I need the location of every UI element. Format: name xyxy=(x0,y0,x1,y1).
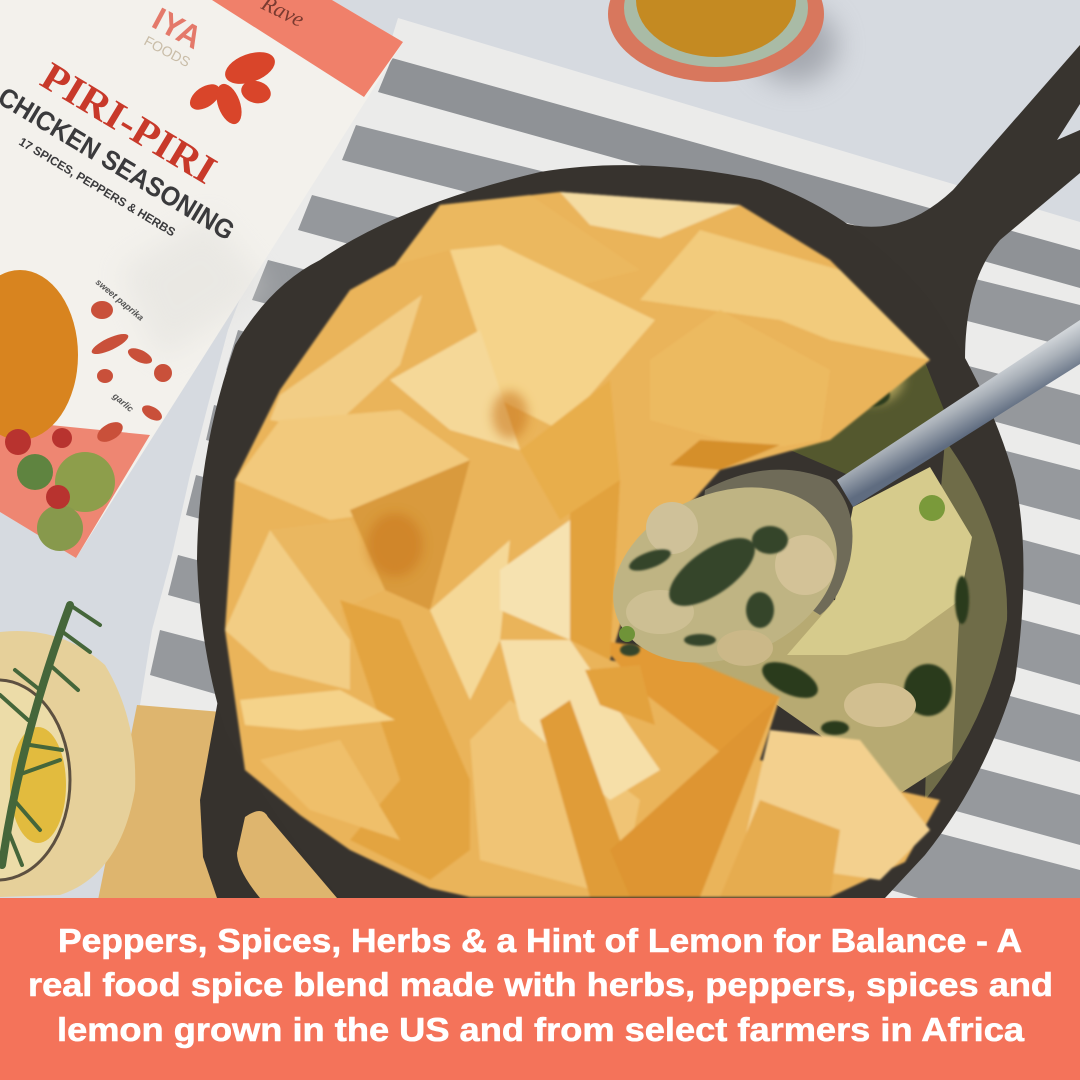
spoon handle xyxy=(837,320,1080,507)
caption banner xyxy=(0,898,1080,1080)
caption text xyxy=(28,922,1053,1048)
right wall highlight xyxy=(925,440,1007,800)
yellow napkin xyxy=(98,705,345,900)
handle opening xyxy=(237,811,337,898)
package top band xyxy=(212,0,403,97)
filling and sauce xyxy=(640,340,972,800)
skillet body xyxy=(197,165,1024,898)
skillet helper handle xyxy=(200,700,345,898)
pepper captions: sweet paprika xyxy=(94,277,146,323)
browned spots xyxy=(367,391,528,577)
pepper captions xyxy=(94,277,146,414)
cast iron skillet xyxy=(197,45,1080,898)
spice pile xyxy=(0,270,78,440)
brand logo xyxy=(142,0,279,127)
glass with rosemary xyxy=(0,605,135,897)
caption text: real food spice blend made with herbs, peppers, spices and xyxy=(28,966,1053,1003)
caption text: lemon grown in the US and from select farmers in Africa xyxy=(57,1011,1025,1048)
package tagline: 17 SPICES, PEPPERS & HERBS xyxy=(16,135,178,239)
brand logo: IYA xyxy=(147,0,208,56)
package subtitle: CHICKEN SEASONING xyxy=(0,81,240,246)
serving spoon xyxy=(587,320,1080,694)
handle slot xyxy=(1057,104,1080,140)
bowl shadow xyxy=(753,7,837,83)
cream sauce xyxy=(787,467,972,655)
greens in spoon xyxy=(620,525,788,656)
filo sheets xyxy=(225,192,930,897)
package bottom band xyxy=(0,420,150,558)
package shading xyxy=(120,215,270,360)
product package xyxy=(0,0,403,558)
pea xyxy=(919,495,945,521)
filling bed under spoon xyxy=(640,600,960,800)
spoon filling xyxy=(587,456,863,694)
herb piles xyxy=(5,428,115,551)
spoon bowl xyxy=(700,470,852,615)
lemon liquid xyxy=(10,727,66,843)
pepper captions: garlic xyxy=(110,390,136,414)
rosemary sprig xyxy=(0,605,100,865)
pepper icons xyxy=(89,301,172,446)
package title: PIRI-PIRI xyxy=(33,53,225,193)
skillet handle xyxy=(840,45,1080,360)
filo pastry crust xyxy=(225,192,940,897)
caption text: Peppers, Spices, Herbs & a Hint of Lemon for Balance - A xyxy=(58,922,1022,959)
greens and chicken xyxy=(757,383,969,735)
striped tablecloth xyxy=(130,18,1080,900)
brand logo: FOODS xyxy=(142,33,193,70)
spice bowl xyxy=(608,0,824,82)
